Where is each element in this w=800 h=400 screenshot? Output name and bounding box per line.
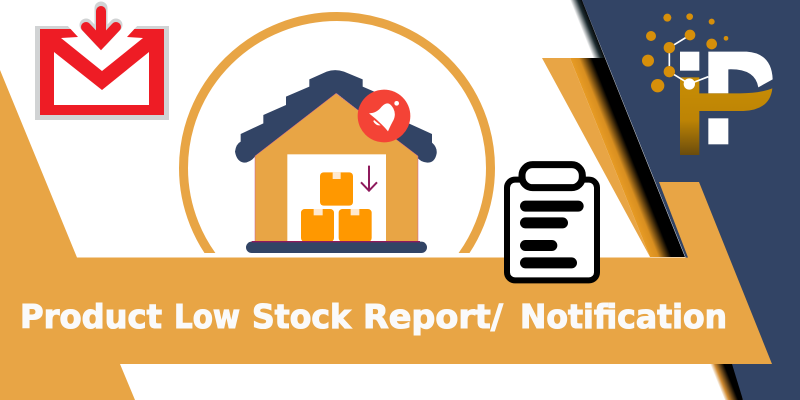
clipboard lines xyxy=(520,201,584,268)
logo white letter shapes xyxy=(680,52,773,144)
icon: clipboard xyxy=(507,165,597,280)
logo gold P xyxy=(680,77,772,155)
title: Stock xyxy=(252,297,352,336)
warehouse door xyxy=(287,154,386,242)
circle ring xyxy=(179,12,495,253)
logo network xyxy=(642,13,728,92)
orange title banner xyxy=(0,70,772,400)
title: Notification xyxy=(520,297,727,336)
title: Product xyxy=(20,297,162,336)
down arrow xyxy=(361,166,377,191)
bell badge xyxy=(358,90,410,142)
logo xyxy=(642,13,773,155)
warehouse body xyxy=(255,93,418,242)
navy side panel xyxy=(582,0,800,400)
warehouse roof xyxy=(235,70,437,163)
title xyxy=(20,297,727,336)
icon: mail with download arrow xyxy=(35,0,169,120)
warehouse floor xyxy=(246,242,427,253)
title: Report/ xyxy=(363,297,504,336)
icon: warehouse xyxy=(235,70,437,253)
gradient diagonal strip xyxy=(542,0,743,400)
title: Low xyxy=(174,297,240,336)
stock boxes xyxy=(301,172,372,242)
